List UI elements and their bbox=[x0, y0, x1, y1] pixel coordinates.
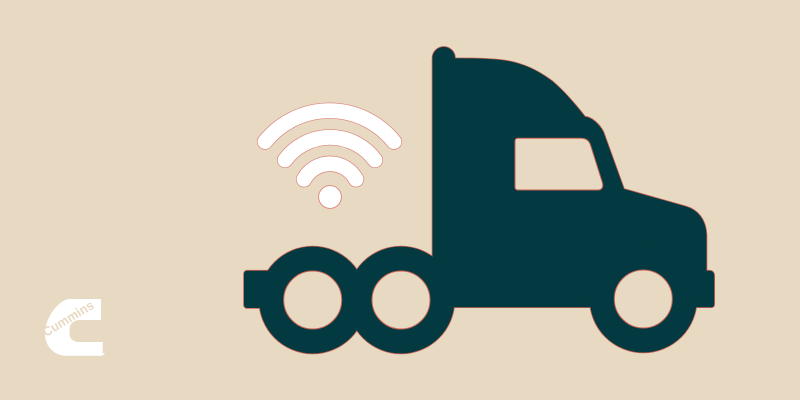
logo registered mark bbox=[102, 353, 104, 355]
icon: truck silhouette bbox=[244, 47, 714, 353]
logo wordmark: Cummins bbox=[40, 297, 96, 340]
logo: Cummins bbox=[40, 297, 104, 356]
icon: wifi signal bbox=[265, 111, 394, 208]
